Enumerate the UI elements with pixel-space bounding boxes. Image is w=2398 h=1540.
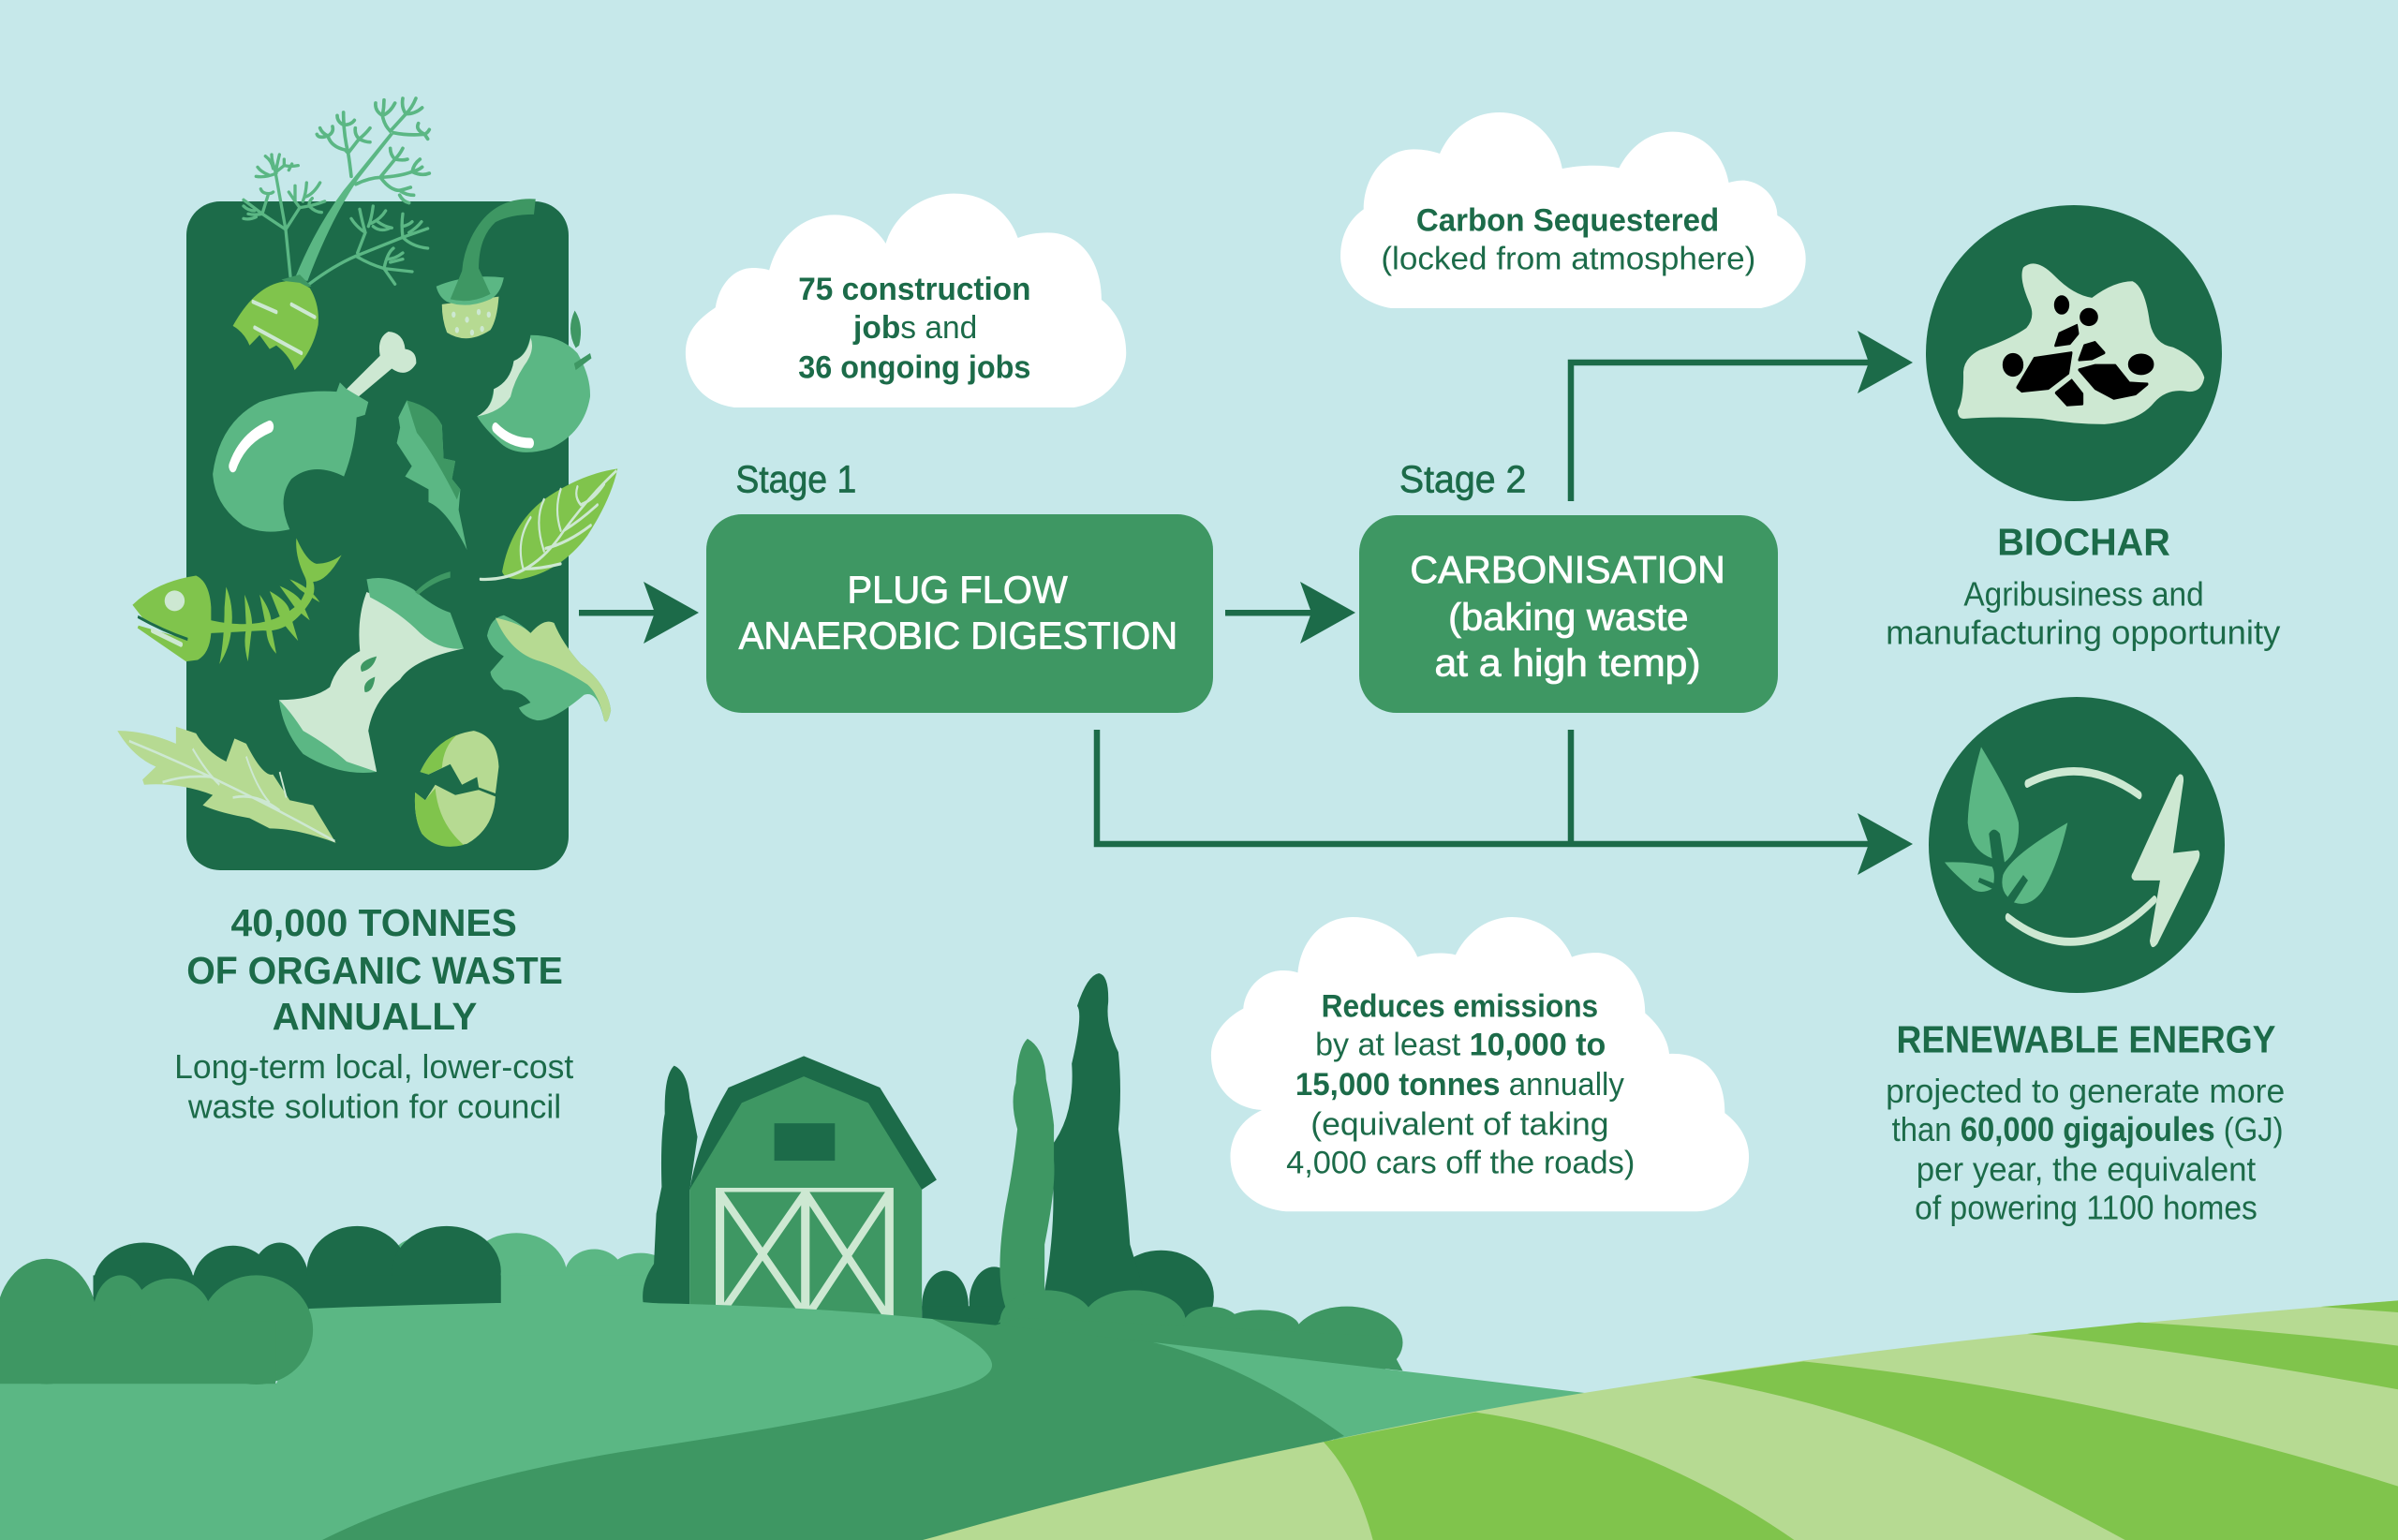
- card background: [186, 201, 569, 870]
- text: emissions callout: by at least 10,000 to: [1315, 1028, 1606, 1063]
- all text labels: [174, 203, 2285, 1226]
- text: renewable energy description: [1886, 1072, 2285, 1226]
- text: emissions callout: 15,000 tonnes annually: [1295, 1067, 1625, 1103]
- text: emissions callout: [1286, 989, 1635, 1180]
- renewable energy circle icon: [1929, 697, 2225, 993]
- text: stage 1 box title: ANAEROBIC DIGESTION: [739, 614, 1177, 657]
- icon: ragged leaf: [487, 615, 611, 722]
- text: waste description: [174, 1047, 573, 1126]
- text: carbon callout: Carbon Sequestered: [1416, 203, 1719, 239]
- arrow: waste to stage 1: [579, 582, 699, 644]
- icon: bitten apple: [477, 310, 591, 452]
- trees and dark hedges: [643, 973, 1214, 1342]
- text: biochar description: manufacturing opportunity: [1886, 613, 2280, 651]
- text: waste heading: [186, 901, 563, 1038]
- text: waste heading: 40,000 TONNES: [231, 901, 517, 944]
- food scraps illustration: [117, 199, 617, 847]
- text: stage 2 label: Stage 2: [1399, 458, 1526, 501]
- biochar circle icon: [1926, 205, 2222, 501]
- icon: dark leaf: [397, 400, 467, 550]
- icon: beetroot stalk: [437, 199, 536, 338]
- right bushes: [995, 1290, 1403, 1379]
- text: waste heading: ANNUALLY: [273, 995, 477, 1038]
- arrow: stages to renewable energy: [1097, 730, 1913, 875]
- text: biochar heading: BIOCHAR: [1997, 521, 2170, 564]
- panel: organic waste card with food scraps: [117, 98, 617, 870]
- text: renewable energy description: projected to generate more: [1886, 1072, 2285, 1110]
- far hill: [1153, 1342, 1592, 1443]
- text: waste description: Long-term local, lower-cost: [174, 1047, 573, 1086]
- text: jobs callout: [798, 272, 1030, 385]
- text: stage 2 box title: (baking waste: [1448, 596, 1689, 639]
- text: waste description: waste solution for council: [187, 1088, 561, 1126]
- text: carbon callout: (locked from atmosphere): [1381, 241, 1755, 276]
- text: stage 1 label: Stage 1: [735, 458, 856, 501]
- stage 1 process box: [706, 514, 1213, 713]
- text: waste heading: OF ORGANIC WASTE: [186, 949, 563, 992]
- text: emissions callout: 4,000 cars off the roads): [1286, 1145, 1635, 1180]
- background bushes: [93, 1226, 675, 1327]
- text: emissions callout: Reduces emissions: [1322, 989, 1598, 1025]
- stage 2 process box: [1359, 515, 1778, 713]
- icon: apple core: [279, 571, 464, 773]
- barn: [689, 1056, 937, 1325]
- icon: broken egg shell: [415, 731, 498, 847]
- icon: fennel fronds: [244, 98, 429, 284]
- text: renewable energy heading: RENEWABLE ENERGY: [1897, 1017, 2275, 1060]
- text: renewable energy description: than 60,000 gigajoules (GJ): [1892, 1110, 2284, 1148]
- text: renewable energy description: of powering 1100 homes: [1915, 1188, 2257, 1226]
- striped crop fields: [923, 1300, 2398, 1540]
- cloud: emissions: [1211, 917, 1749, 1211]
- text: renewable energy description: per year, the equivalent: [1917, 1149, 2256, 1188]
- text: jobs callout: 75 construction: [798, 272, 1030, 307]
- text: stage 1 box title: PLUG FLOW: [848, 568, 1068, 611]
- arrow: stage 2 to biochar: [1571, 331, 1913, 501]
- text: carbon callout: [1381, 203, 1755, 276]
- middle hill: [309, 1311, 1344, 1540]
- icon: chicken drumstick: [213, 332, 416, 532]
- text: biochar description: Agribusiness and: [1963, 575, 2204, 614]
- arrow: stage 1 to stage 2: [1225, 582, 1355, 644]
- icon: fennel bulb: [233, 274, 318, 370]
- text: stage 2 box title: at a high temp): [1434, 642, 1701, 685]
- icon: rocket leaf: [117, 727, 336, 843]
- text: stage 2 box title: CARBONISATION: [1410, 548, 1725, 591]
- text: emissions callout: (equivalent of taking: [1310, 1106, 1609, 1142]
- landscape scene: [0, 973, 2398, 1540]
- text: jobs callout: 36 ongoing jobs: [798, 349, 1030, 385]
- icon: veined leaf: [481, 468, 617, 579]
- text: stage 2 box title: [1410, 548, 1725, 685]
- cloud: jobs: [686, 194, 1126, 407]
- cloud: carbon sequestered: [1340, 112, 1806, 308]
- foreground left bushes: [0, 1259, 313, 1385]
- icon: fish skeleton: [132, 538, 342, 664]
- near hill: [0, 1303, 992, 1540]
- text: jobs callout: jobs and: [852, 310, 977, 346]
- text: stage 1 box title: [739, 568, 1177, 657]
- text: biochar description: [1886, 575, 2280, 651]
